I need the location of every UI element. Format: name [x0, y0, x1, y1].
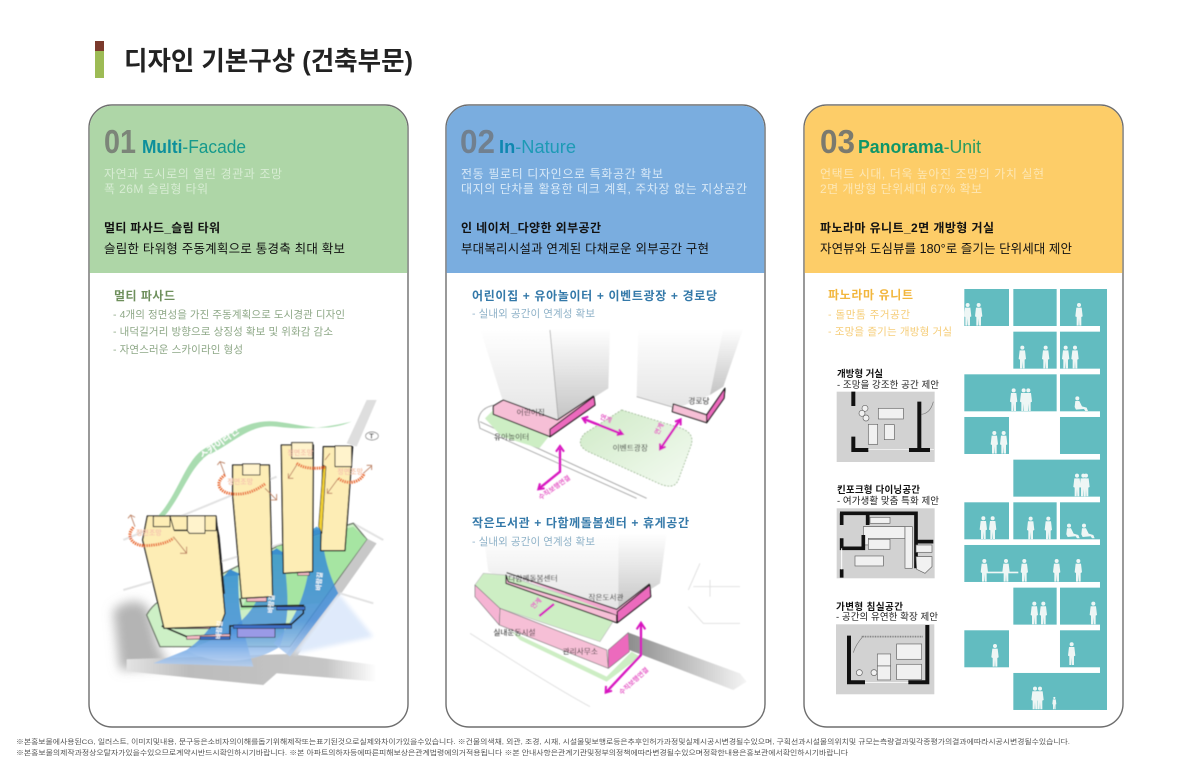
labels: 이벤트광장 — [613, 443, 648, 453]
chart: tower site illustration — [113, 400, 383, 685]
wind labels: 바람길 — [266, 594, 276, 613]
floor plan: open living room — [837, 392, 935, 462]
white silhouettes of people — [964, 303, 1097, 709]
labels — [493, 573, 624, 656]
pink podium left — [493, 396, 595, 437]
wind labels: 바람길 — [314, 572, 324, 591]
icon: title marker — [95, 41, 104, 78]
tower 1 — [143, 516, 225, 628]
podium strips — [162, 572, 309, 639]
arrow labels: 수직보행연결 — [537, 473, 572, 502]
view labels — [136, 448, 364, 537]
text block: multi facade notes: - 4개의 정면성을 가진 주동계획으로 도시경관 디자인 — [113, 308, 345, 321]
view arrows — [128, 453, 372, 553]
wind labels: 바람길 — [214, 620, 224, 639]
text block: lower facilities: - 실내외 공간이 연계성 확보 — [472, 535, 595, 548]
panel header: Panorama-Unit — [858, 137, 981, 157]
green site — [147, 523, 367, 647]
labels: 관리사무소 — [563, 646, 598, 656]
grey ramp — [628, 633, 747, 690]
text block: variable bedroom: - 공간의 유연한 확장 제안 — [836, 611, 938, 623]
panel header — [805, 106, 1122, 273]
text block: upper facilities — [472, 289, 717, 320]
view labels: 정면조망 — [337, 467, 364, 476]
labels: 작은도서관 — [588, 592, 624, 602]
chart: upper facility diagram — [478, 328, 743, 502]
pink podium lower — [475, 585, 629, 668]
view labels: 정면조망 — [227, 477, 254, 486]
panel header: In-Nature — [499, 137, 576, 157]
green skyline curve: 스카이라인 — [197, 424, 241, 462]
panel header — [90, 106, 407, 273]
panel header: 자연뷰와 도심뷰를 180°로 즐기는 단위세대 제안 — [820, 242, 1072, 256]
panel: 03 Panorama-Unit — [804, 105, 1123, 727]
text block: variable bedroom — [836, 601, 938, 623]
title text: 디자인 기본구상 (건축부문) — [124, 46, 413, 76]
left tower — [480, 328, 610, 420]
panel frame — [446, 105, 765, 727]
panel header: 02 — [460, 123, 495, 160]
panel frame — [804, 105, 1123, 727]
pink podium upper — [506, 573, 651, 623]
arrow labels: 연계 — [652, 421, 666, 436]
text block: multi facade notes: 멀티 파사드 — [114, 289, 175, 303]
panel header: 슬림한 타워형 주동계획으로 통경축 최대 확보 — [104, 242, 345, 256]
panel header: 자연과 도시로의 열린 경관과 조망 — [104, 167, 282, 181]
panel header: Multi-Facade — [142, 137, 246, 157]
panel header: 언택트 시대, 더욱 높아진 조망의 가치 실현 — [820, 167, 1044, 181]
blue wind streams — [153, 527, 338, 667]
green play area — [485, 408, 550, 448]
text block: multi facade notes: - 내덕길거리 방향으로 상징성 확보 및 위화감 감소 — [113, 325, 333, 338]
panel header: 부대복리시설과 연계된 다채로운 외부공간 구현 — [461, 242, 709, 256]
arrow labels: 연계 — [528, 596, 543, 611]
panel header: 폭 26M 슬림형 타워 — [104, 182, 208, 196]
panel header: 멀티 파사드_슬림 타워 — [104, 221, 220, 235]
text block: panorama notes — [828, 288, 952, 338]
arrow labels: 수직보행연결 — [617, 665, 650, 696]
labels — [494, 395, 709, 453]
text block: open living room: - 조망을 강조한 공간 제안 — [837, 380, 939, 391]
site outline — [478, 405, 647, 498]
floor plan: kinfolk dining — [837, 508, 935, 578]
text block: multi facade notes: - 자연스러운 스카이라인 형성 — [113, 344, 243, 356]
tower — [483, 533, 667, 610]
green skyline curve — [150, 421, 352, 527]
labels: 실내운동시설 — [493, 627, 536, 637]
panel: 02 In-Nature — [446, 105, 765, 727]
labels: 경로당 — [688, 395, 709, 405]
text block: variable bedroom: 가변형 침실공간 — [836, 601, 903, 613]
text block: panorama notes: 파노라마 유니트 — [828, 288, 913, 302]
text block: panorama notes: - 조망을 즐기는 개방형 거실 — [828, 326, 952, 338]
ground and roads — [113, 400, 383, 685]
panel header — [447, 106, 764, 273]
panel header: 대지의 단차를 활용한 데크 계획, 주차장 없는 지상공간 — [461, 182, 747, 196]
panel header: 인 네이처_다양한 외부공간 — [461, 220, 601, 235]
tower 4 — [319, 446, 353, 551]
text block: kinfolk dining: 킨포크형 다이닝공간 — [837, 484, 920, 496]
footnote: ※본홍보물에사용된CG, 일러스트, 이미지및내용, 문구등은소비자의이해를돕기위해제작또는표기된것으로실제와차이가있을수있습니다. ※건물의색채, 외관, 조경, 시재, 시설물및보행로등은추후인허가과정및실제시공시변경될수있으며, 구획선과시설물의위치및 규모는측량결과및각종평가의결과에따라시공시변경될수있습니다. — [16, 737, 1070, 746]
labels: 유아놀이터 — [494, 431, 529, 441]
icon: north mark — [366, 431, 378, 440]
text block: panorama notes: - 돌만톰 주거공간 — [828, 309, 910, 321]
title — [95, 41, 413, 78]
lower green strip — [512, 632, 640, 682]
view labels: 정면조망 — [136, 528, 162, 537]
text block: kinfolk dining: - 여가생활 맞춤 특화 제안 — [837, 495, 939, 507]
panel header: 전동 필로티 디자인으로 특화공간 확보 — [461, 167, 663, 181]
green event plaza — [580, 410, 692, 486]
chart: unit elevation grid with silhouettes — [964, 289, 1107, 710]
wind labels — [214, 572, 324, 639]
arrow labels — [528, 596, 650, 696]
text block: kinfolk dining — [837, 484, 939, 507]
text block: open living room — [837, 368, 939, 391]
tower 3 — [281, 443, 313, 573]
footnote — [16, 737, 1070, 757]
panel frame — [89, 105, 408, 727]
green deck — [475, 573, 618, 642]
text block: lower facilities: 작은도서관 + 다함께돌봄센터 + 휴게공간 — [472, 515, 689, 530]
icon: north mark: T — [369, 431, 374, 440]
labels: 어린이집 — [517, 407, 545, 417]
panel header: 2면 개방형 단위세대 67% 확보 — [820, 182, 982, 196]
magenta arrows — [539, 604, 645, 693]
floor plan: variable bedroom — [836, 624, 934, 694]
labels: 다함께돌봄센터 — [508, 573, 558, 583]
text block: open living room: 개방형 거실 — [837, 368, 883, 380]
text block: lower facilities — [472, 515, 689, 548]
arrow labels — [537, 412, 666, 502]
right tower — [637, 328, 743, 408]
teal unit blocks — [964, 289, 1107, 710]
orange view arcs — [130, 463, 364, 546]
pink podium right — [672, 388, 725, 423]
background outlines — [470, 563, 740, 707]
text block: multi facade notes — [113, 289, 345, 356]
panel header: 파노라마 유니트_2면 개방형 거실 — [820, 220, 994, 235]
text block: upper facilities: - 실내외 공간이 연계성 확보 — [472, 307, 595, 320]
panel: 01 Multi-Facade — [89, 105, 408, 727]
magenta arrows — [538, 417, 681, 489]
text block: upper facilities: 어린이집 + 유아놀이터 + 이벤트광장 + 경로당 — [472, 289, 717, 303]
tower 2 — [233, 464, 273, 598]
arrow labels: 연계 — [599, 412, 613, 425]
panel header: 03 — [820, 123, 855, 160]
panel header: 01 — [104, 123, 136, 160]
view labels: 정면조망 — [287, 448, 314, 457]
chart: lower facility diagram — [470, 533, 747, 707]
footnote: ※본홍보물의제작과정상오탈자가있을수있으므로계약시반드시확인하시기바랍니다. ※본 아파트의하자등에따른피해보상은관계법령에의거적용됩니다 ※본 안내사항은관계기관및정부의정책에따라변경될수있으며정확한내용은홍보관에서확인하시기바랍니다 — [16, 748, 849, 757]
